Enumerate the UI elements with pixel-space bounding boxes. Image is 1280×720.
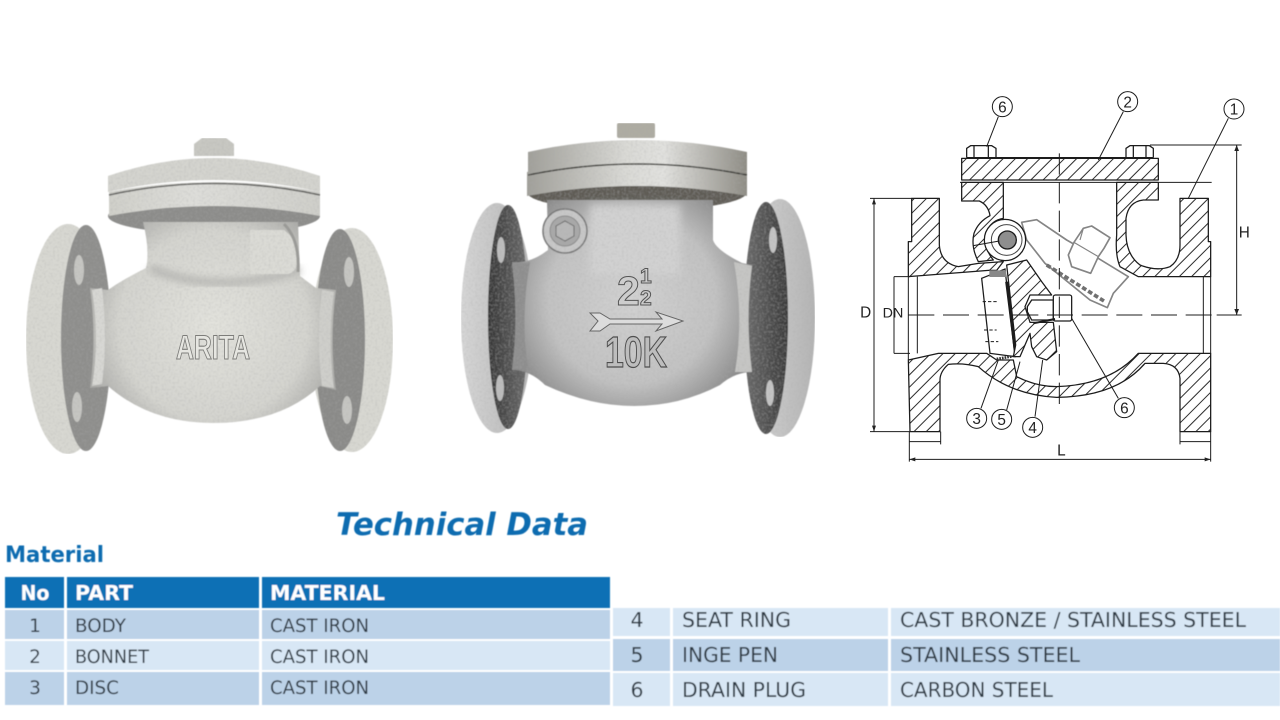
bonnet — [962, 158, 1158, 180]
row 2: 2 — [29, 647, 41, 668]
row 6: CARBON STEEL — [900, 678, 1054, 702]
right end flange — [744, 199, 815, 437]
body casting — [512, 200, 752, 406]
dimension L: L — [1057, 443, 1066, 460]
row 5 — [613, 639, 1280, 671]
row 5: INGE PEN — [682, 643, 778, 667]
callout 3: 3 — [972, 411, 981, 428]
neck shoulder shading — [150, 268, 300, 283]
callout 6 top — [987, 97, 1012, 147]
left shoulder shading — [512, 262, 530, 370]
boss shadow — [284, 224, 298, 272]
bonnet bolts — [967, 146, 1153, 158]
row 1: CAST IRON — [270, 616, 369, 637]
row 3 — [5, 672, 610, 705]
cover bolt — [617, 123, 655, 138]
callout 5 — [992, 362, 1020, 429]
photo: 10K check valve — [461, 123, 815, 437]
table: parts 1 to 3 — [5, 577, 610, 705]
table header: MATERIAL — [270, 581, 385, 605]
right shoulder highlight — [734, 262, 752, 372]
row 2: BONNET — [75, 647, 150, 668]
callout 5: 5 — [997, 412, 1006, 429]
left body shoulder shading — [92, 288, 105, 386]
upper cover flange — [108, 158, 320, 192]
photo: ARITA check valve — [26, 138, 393, 454]
callout 1: 1 — [1230, 102, 1238, 119]
callout 4 — [1023, 360, 1043, 437]
table header — [5, 577, 610, 608]
row 5: STAINLESS STEEL — [900, 643, 1081, 667]
cover bolt — [194, 138, 234, 156]
disc nut — [1027, 295, 1072, 323]
dimension D: D — [860, 304, 871, 321]
cast mark: size 2 1/2: 2 — [617, 268, 640, 314]
row 3: DISC — [75, 678, 119, 699]
drain plug boss — [543, 209, 587, 253]
dimension L — [909, 432, 1211, 462]
body casting — [908, 182, 1212, 432]
open-position disc (phantom) — [1022, 220, 1128, 308]
lower cover flange — [527, 161, 747, 196]
hinge pin — [973, 219, 1026, 261]
table: parts 4 to 6 — [613, 608, 1280, 706]
upper cover flange — [528, 140, 747, 172]
title: Technical Data: Technical Data — [336, 507, 588, 543]
row 6: 6 — [630, 678, 644, 702]
row 3: 3 — [29, 678, 41, 699]
row 6: DRAIN PLUG — [682, 678, 806, 702]
callout 2 — [1098, 92, 1138, 160]
callout 4: 4 — [1028, 420, 1037, 437]
body casting — [90, 222, 336, 423]
cover underside — [527, 173, 747, 211]
technical drawing: valve cross-section — [860, 92, 1250, 462]
row 4: CAST BRONZE / STAINLESS STEEL — [900, 608, 1247, 632]
row 1: BODY — [75, 616, 127, 637]
dimension DN: DN — [883, 304, 903, 320]
cast mark: 10K: 10K — [605, 328, 667, 377]
row 2: CAST IRON — [270, 647, 369, 668]
row 6 — [613, 673, 1280, 706]
centre lines — [908, 153, 1222, 406]
left end flange — [26, 224, 111, 454]
dimension D — [860, 198, 912, 432]
row 2 — [5, 641, 610, 670]
disc — [982, 269, 1015, 359]
row 5: 5 — [630, 643, 644, 667]
dimension H: H — [1239, 225, 1250, 242]
left end flange — [461, 203, 533, 433]
row 4: 4 — [630, 608, 644, 632]
cast mark: size 2 1/2: 2 — [640, 287, 652, 310]
disc arm — [1007, 260, 1057, 360]
cover underside — [108, 198, 320, 234]
dimension DN — [883, 277, 910, 353]
row 1: 1 — [29, 616, 41, 637]
callout 1 — [1188, 99, 1244, 198]
lower cover flange — [109, 182, 320, 216]
callout 6 bottom — [1072, 318, 1134, 418]
cast mark: size 2 1/2: 1 — [640, 265, 652, 288]
cast mark: size 2 1/2 — [617, 265, 652, 314]
callout 6 top: 6 — [998, 99, 1007, 116]
hinge boss — [250, 230, 298, 274]
table header: No — [20, 581, 50, 605]
neck highlight — [590, 205, 680, 275]
flange gap — [528, 164, 747, 175]
right end flange — [311, 228, 393, 452]
row 1 — [5, 610, 610, 639]
callout 2: 2 — [1123, 94, 1132, 111]
callout 3 — [967, 360, 998, 428]
row 3: CAST IRON — [270, 678, 369, 699]
cast mark: ARITA: ARITA — [176, 329, 250, 367]
callout 6 bottom: 6 — [1120, 400, 1129, 417]
row 4: SEAT RING — [682, 608, 791, 632]
heading: Material: Material — [5, 543, 104, 568]
dimension H — [1150, 145, 1250, 315]
row 4 — [613, 608, 1280, 636]
right body shoulder shading — [319, 290, 334, 388]
cast mark: flow arrow — [590, 312, 683, 331]
table header: PART — [75, 581, 133, 605]
flange gap — [109, 184, 320, 195]
